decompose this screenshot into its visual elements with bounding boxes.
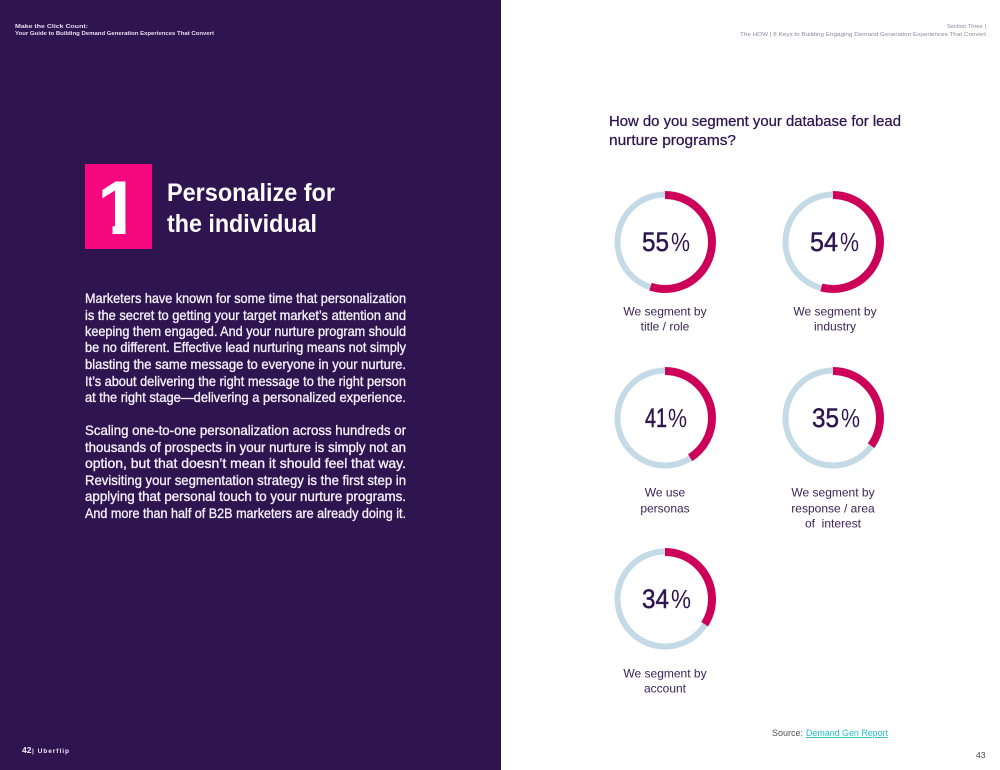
left footer: | Uberflip — [32, 748, 69, 755]
donut chart: 54% industry: We segment by — [793, 304, 877, 318]
donut chart: 35% response / area of interest: % — [841, 403, 860, 433]
donut chart: 54% industry: 54 — [810, 227, 838, 257]
body text: second paragraph: applying that personal touch to your nurture programs. — [85, 489, 406, 504]
donut chart: 35% response / area of interest: of interest — [805, 516, 862, 530]
left running header: Make the Click Count: — [15, 24, 88, 30]
donut chart: 54% industry: % — [840, 227, 859, 257]
body text: second paragraph: Revisiting your segmentation strategy is the first step in — [85, 473, 406, 488]
body text: second paragraph: option, but that doesn’t mean it should feel that way. — [85, 456, 406, 471]
donut chart: 35% response / area of interest — [786, 370, 880, 530]
donut chart: 34% account — [618, 552, 712, 696]
left footer — [22, 745, 69, 755]
body text: first paragraph: It’s about delivering the right message to the right person — [85, 374, 406, 389]
donut chart: 55% title / role: We segment by — [623, 304, 707, 318]
body text: first paragraph: blasting the same message to everyone in your nurture. — [85, 357, 406, 372]
donut chart: 55% title / role: title / role — [641, 320, 690, 334]
heading: the individual — [167, 210, 317, 238]
heading: Personalize for — [167, 179, 335, 207]
donut chart: 41% personas: personas — [640, 502, 690, 516]
donut chart: 35% response / area of interest: response / area — [791, 502, 875, 516]
donut chart: 35% response / area of interest: We segment by — [791, 486, 875, 500]
panel: left purple page — [0, 0, 501, 770]
body text: first paragraph: is the secret to getting your target market’s attention and — [85, 308, 406, 323]
body text: first paragraph: be no different. Effective lead nurturing means not simply — [85, 340, 406, 355]
heading — [167, 179, 335, 238]
source note — [772, 728, 888, 739]
donut chart: 41% personas: 41 — [645, 403, 667, 433]
page number 43: 43 — [976, 750, 986, 760]
number badge: 1 — [97, 166, 140, 251]
source note: Demand Gen Report — [806, 728, 888, 739]
donut chart: 34% account: We segment by — [623, 666, 707, 680]
body text: second paragraph: thousands of prospects in your nurture is simply not an — [85, 440, 406, 455]
body text: second paragraph: Scaling one-to-one personalization across hundreds or — [85, 423, 406, 438]
donut chart: 41% personas: % — [668, 403, 687, 433]
body text: first paragraph — [85, 291, 406, 405]
donut chart: 41% personas — [618, 370, 712, 516]
body text: second paragraph — [85, 423, 406, 521]
donut chart: 55% title / role — [618, 194, 712, 334]
right running header — [740, 24, 986, 38]
source note: Source: — [772, 728, 803, 739]
donut chart: 34% account: 34 — [642, 584, 669, 614]
chart question heading: How do you segment your database for lead — [609, 114, 901, 130]
chart question heading — [609, 114, 901, 149]
donut chart: 41% personas: We use — [645, 486, 686, 500]
donut chart: 34% account: account — [644, 682, 687, 696]
body text: second paragraph: And more than half of B2B marketers are already doing it. — [85, 506, 406, 521]
donut chart: 54% industry — [786, 194, 880, 334]
donut chart: 55% title / role: 55 — [642, 227, 669, 257]
chart question heading: nurture programs? — [609, 133, 736, 149]
donut chart: 34% account: % — [671, 584, 691, 614]
donut chart: 54% industry: industry — [814, 320, 856, 334]
left footer: 42 — [22, 745, 32, 755]
body text: first paragraph: Marketers have known for some time that personalization — [85, 291, 406, 306]
body text: first paragraph: keeping them engaged. And your nurture program should — [85, 324, 406, 339]
body text: first paragraph: at the right stage—delivering a personalized experience. — [85, 390, 406, 405]
right running header: The HOW | 8 Keys to Building Engaging Demand Generation Experiences That Convert — [740, 32, 986, 38]
right running header: Section Three | — [947, 24, 986, 30]
left running header: Your Guide to Building Demand Generation Experiences That Convert — [15, 31, 214, 37]
left running header — [15, 24, 214, 37]
number badge — [85, 164, 152, 251]
donut chart: 35% response / area of interest: 35 — [812, 403, 839, 433]
donut chart: 55% title / role: % — [671, 227, 690, 257]
